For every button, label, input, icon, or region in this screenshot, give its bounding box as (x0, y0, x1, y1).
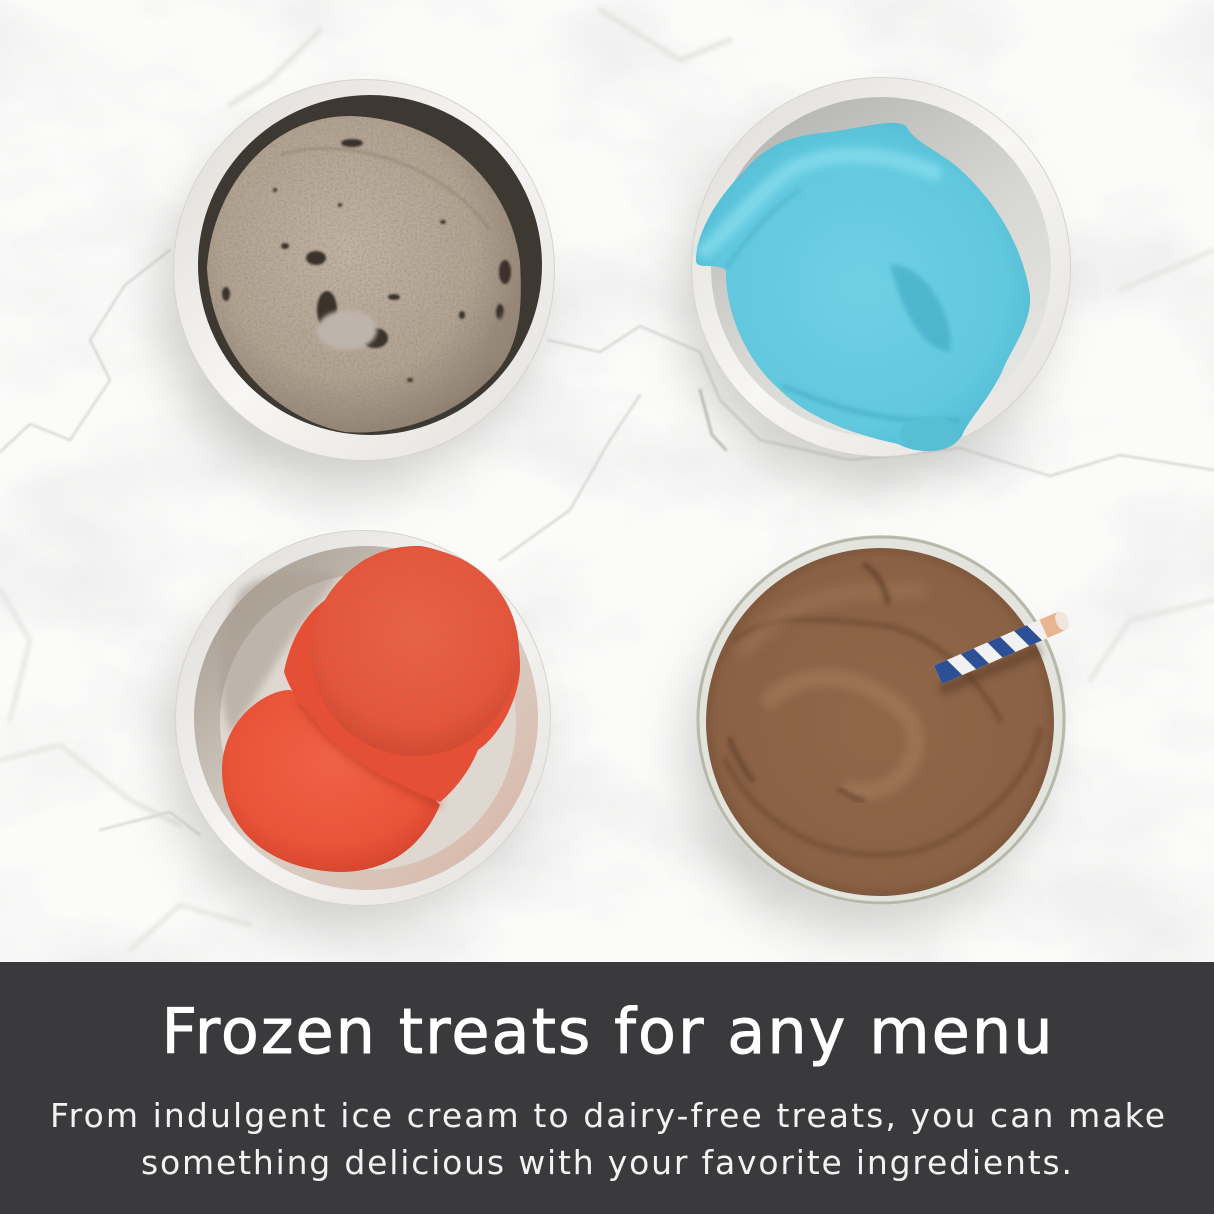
caption band (0, 962, 1214, 1214)
body text (50, 1096, 1165, 1182)
glass: chocolate shake with straw (696, 535, 1071, 905)
bowl: cookies and cream ice cream (174, 80, 554, 460)
icon: striped straw (934, 609, 1071, 690)
marble background (0, 0, 1214, 962)
shadows under bowls (160, 115, 1050, 935)
bowl: blue ice cream (692, 78, 1070, 456)
heading: Frozen treats for any menu (162, 995, 1052, 1068)
body text: From indulgent ice cream to dairy-free treats, you can make (50, 1096, 1165, 1135)
bowl: red sorbet (176, 530, 550, 906)
body text: something delicious with your favorite ingredients. (141, 1143, 1072, 1182)
